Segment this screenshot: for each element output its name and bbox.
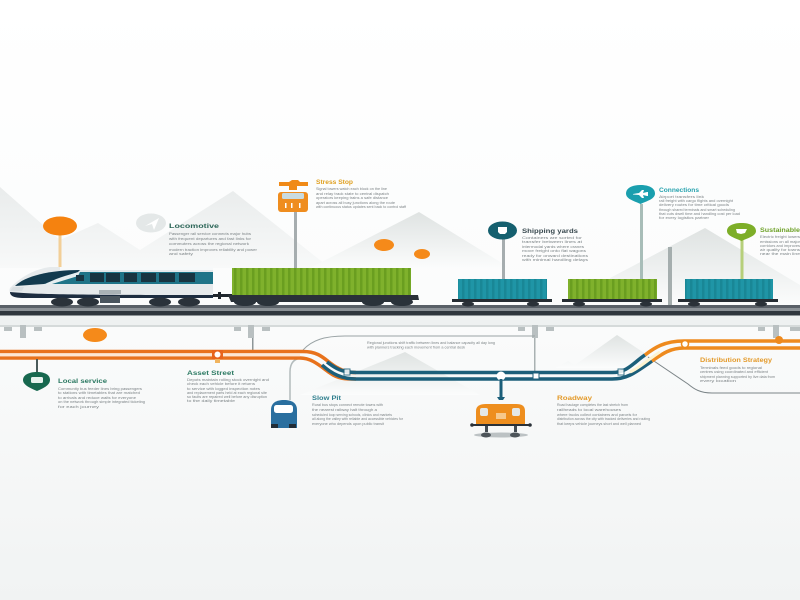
teal container wagon 3 <box>678 279 778 306</box>
text: node block: and replacement parts held at each regional site <box>187 390 268 395</box>
pin: teal circle <box>488 222 517 279</box>
text: green block <box>760 228 800 256</box>
marker: orange dot with pole <box>43 216 77 267</box>
text: node block <box>187 371 269 403</box>
grey pole <box>668 247 672 305</box>
text: node block: Asset Street <box>187 371 234 377</box>
text: green block: emissions on all major <box>760 239 800 244</box>
route nodes <box>212 336 783 380</box>
pin: green location <box>727 223 756 279</box>
text: container block: transfer between lines at <box>522 239 583 244</box>
text: signal block: and relay track state to central dispatch <box>316 191 389 196</box>
thin connector lines <box>290 336 800 400</box>
text: signal block: operators keeping trains a safe distance <box>316 195 389 200</box>
text: roadway block <box>557 396 650 426</box>
text: green block: near the main line <box>760 251 800 256</box>
text: bus block: all along the valley with reliable and accessible vehicles for <box>312 416 404 421</box>
mountains: upper range <box>0 187 800 305</box>
text: right block: centres using coordinated and efficient <box>700 369 769 374</box>
text: bus block: everyone who depends upon public transit <box>312 421 385 426</box>
text: upper left block: Locomotive <box>169 224 220 230</box>
text: top centre note: Regional junctions shift traffic between lines and balance capacity all day long <box>367 340 495 345</box>
text: signal block: Signal towers watch each block on the line <box>316 186 388 191</box>
text: bus block: Rural bus stops connect remote towns with <box>312 402 383 407</box>
icon: orange signal on pole <box>278 180 308 268</box>
text: right block: Terminals feed goods to regional <box>700 365 762 370</box>
icon: pale compass circle <box>136 214 166 232</box>
text: air link block: for every logistics partner <box>659 215 710 220</box>
text: node block: so faults are repaired well before any disruption <box>187 394 267 399</box>
text: roadway block: that keeps vehicle journeys short and well planned <box>557 421 641 426</box>
pin: green bus marker <box>23 359 50 391</box>
text: air link block: that cuts dwell time and handling cost per load <box>659 211 740 216</box>
icon: blue bus <box>271 400 297 428</box>
text: right block: shipment planning supported by live data from <box>700 374 776 379</box>
text: right block: Distribution Strategy <box>700 358 773 364</box>
green container wagon <box>228 268 419 306</box>
text: lower left block: Community bus feeder lines bring passengers <box>58 386 142 391</box>
text: bus block: Slow Pit <box>312 396 341 402</box>
text: signal block: apart across all busy junctions along the route <box>316 200 396 205</box>
text: green block: corridors and improves <box>760 243 800 248</box>
text: top centre note: with planners tracking each movement from a central desk <box>367 344 465 350</box>
text: container block: ready for onward destinations <box>522 253 588 258</box>
text: lower left block: to arrivals and reduce waits for everyone <box>58 395 137 400</box>
text: roadway block: distribution across the city with tracked deliveries and routing <box>557 416 650 421</box>
text: air link block: Airport transfers link <box>659 194 704 199</box>
text: lower left block: to stations with timetables that are matched <box>58 390 140 395</box>
icon: orange maintenance car <box>470 379 532 438</box>
text: signal block: with continuous status updates sent back to control staff <box>316 204 407 209</box>
text: lower left block: Local service <box>58 379 108 385</box>
text: air link block: delivery routes for time critical goods <box>659 202 729 207</box>
text: node block: check each vehicle before it returns <box>187 381 255 386</box>
text: air link block: through shared terminals and smart scheduling <box>659 207 735 212</box>
text: bus block: scheduled loop serving schools, clinics and markets <box>312 412 392 417</box>
text: node block: to service with logged inspection notes <box>187 386 260 391</box>
text: node block: Depots maintain rolling stock overnight and <box>187 377 269 382</box>
text: upper left block <box>169 224 258 256</box>
text: roadway block: where trucks collect containers and parcels for <box>557 412 638 417</box>
text: lower left block: for each journey <box>58 404 99 409</box>
pin: teal location with plane <box>626 185 655 279</box>
text: air link block: Connections <box>659 188 700 194</box>
text: top centre note <box>367 340 495 350</box>
text: lower left block <box>58 379 145 409</box>
mountains: lower range <box>300 335 652 395</box>
text: container block: Containers are sorted for <box>522 235 583 240</box>
text: green block: air quality for towns <box>760 247 800 252</box>
text: container block <box>522 229 588 262</box>
text: container block: Shipping yards <box>522 229 579 235</box>
text: upper left block: with frequent departures and fast links for <box>169 236 252 241</box>
track deck <box>0 305 800 372</box>
text: container block: intermodal yards where cranes <box>522 244 584 249</box>
text: container block: move freight onto flat wagons <box>522 248 586 253</box>
text: lower left block: on the network through simple integrated ticketing <box>58 399 145 404</box>
text: right block <box>700 358 776 383</box>
text: bus block: the nearest railway halt through a <box>312 407 378 412</box>
text: roadway block: Roadway <box>557 396 593 402</box>
text: roadway block: railheads to local warehouses <box>557 407 621 412</box>
text: green block: Sustainable <box>760 228 800 234</box>
text: upper left block: Passenger rail service connects major hubs <box>169 231 251 236</box>
route: orange and teal rail lines <box>0 341 800 379</box>
text: right block: every location <box>700 378 736 383</box>
text: green block: Electric freight lowers <box>760 234 800 239</box>
text: upper left block: commuters across the regional network <box>169 241 249 246</box>
text: signal block <box>316 180 407 209</box>
text: container block: with minimal handling delays <box>522 257 588 262</box>
teal container wagon 1 <box>452 279 552 306</box>
text: air link block <box>659 188 740 220</box>
text: upper left block: modern traction improves reliability and power <box>169 247 258 252</box>
decorative orange dots <box>83 239 430 342</box>
text: roadway block: Road haulage completes the last stretch from <box>557 402 629 407</box>
text: node block: to the daily timetable <box>187 398 236 403</box>
text: air link block: rail freight with cargo flights and overnight <box>659 198 734 203</box>
locomotive <box>10 267 233 306</box>
green container wagon 2 <box>562 279 662 306</box>
text: bus block <box>312 396 404 426</box>
text: signal block: Stress Stop <box>316 180 353 186</box>
text: upper left block: and safety <box>169 251 193 256</box>
